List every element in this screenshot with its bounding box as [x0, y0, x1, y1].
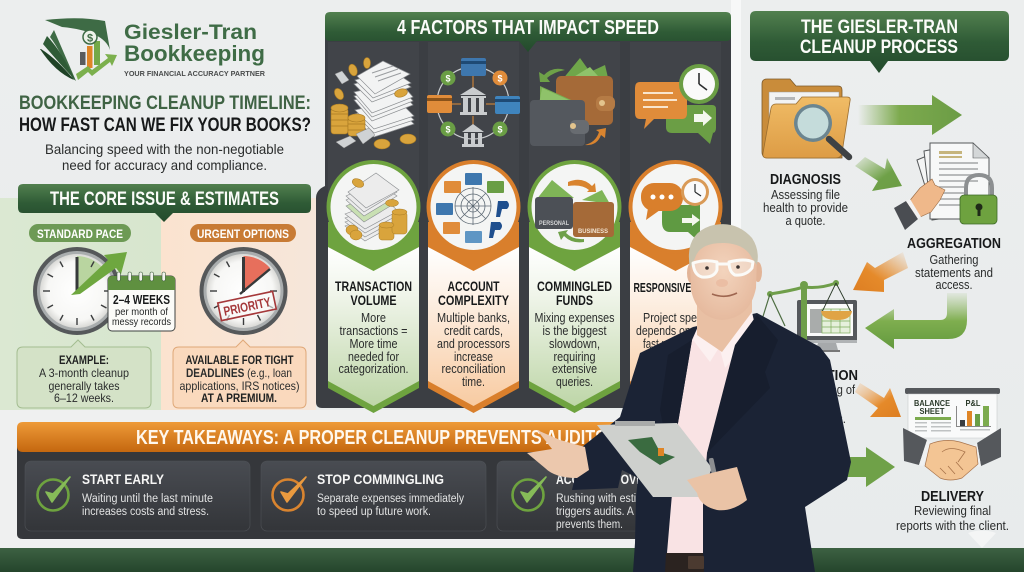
card: responsiveness	[628, 160, 722, 413]
card: account complexity	[426, 160, 520, 413]
panel background	[316, 30, 731, 408]
callout: example	[17, 340, 151, 408]
card title	[438, 279, 509, 308]
card text: More	[361, 311, 386, 325]
card title	[537, 279, 612, 308]
banner	[17, 422, 725, 452]
icon: priority clock	[200, 247, 288, 335]
card text: transactions =	[340, 324, 408, 338]
step: aggregation: AGGREGATION	[907, 236, 1001, 252]
step: aggregation: Gathering	[930, 253, 979, 267]
takeaway: accuracy over speed: prevents them.	[556, 519, 623, 531]
takeaway: start early: Waiting until the last minute	[82, 493, 213, 505]
callout: available for tight deadlines: AT A PREMIUM.	[201, 391, 277, 405]
step: aggregation	[907, 236, 1001, 292]
heading: the core issue and estimates: THE CORE ISSUE & ESTIMATES	[50, 189, 279, 210]
step: reconciliation	[746, 368, 858, 426]
callout: example: EXAMPLE:	[59, 353, 109, 367]
takeaway: accuracy over speed: triggers audits. A proper cleanup	[556, 506, 706, 518]
card: transaction volume	[326, 160, 420, 413]
banner: KEY TAKEAWAYS: A PROPER CLEANUP PREVENTS AUDITS	[136, 427, 606, 449]
calendar: 2-4 weeks	[108, 272, 175, 331]
logo mark: $	[87, 32, 93, 44]
icon: reports and handshake: BALANCE	[914, 398, 950, 408]
takeaway: accuracy over speed	[497, 461, 722, 531]
card text	[437, 311, 510, 389]
arrow: curved return	[865, 293, 967, 349]
background tint: standard pace column	[0, 198, 161, 412]
card text: Project speed	[643, 311, 709, 325]
heading: 4 FACTORS THAT IMPACT SPEED	[397, 17, 659, 39]
icon: reports and handshake	[903, 388, 1001, 480]
subtitle: Balancing speed with the non-negotiable	[45, 141, 284, 157]
card: commingled funds	[528, 160, 622, 413]
step: diagnosis	[763, 172, 848, 228]
icon: banks and cards network: $	[497, 74, 503, 84]
head	[687, 224, 762, 320]
icon: green check	[512, 477, 546, 510]
icon: paper stacks and coins	[331, 58, 416, 149]
heading: the core issue and estimates	[18, 184, 311, 222]
calendar: 2-4 weeks: messy records	[112, 316, 171, 328]
icon: banks and cards network: $	[445, 74, 451, 84]
calendar: 2-4 weeks: 2–4 WEEKS	[113, 293, 170, 307]
icon: personal and business wallets	[535, 180, 614, 242]
arrow: aggregation to reconciliation	[853, 252, 908, 292]
arrow: diagnosis to aggregation	[855, 157, 902, 191]
step: reconciliation: RECONCILIATION	[746, 368, 858, 384]
card text	[636, 311, 714, 351]
suit	[572, 313, 851, 572]
card text: requiring	[554, 350, 596, 364]
icon: chat bubbles and clock	[635, 64, 719, 144]
icon: orange check	[272, 477, 306, 510]
callout: available for tight deadlines: applications, IRS notices)	[180, 379, 300, 393]
calendar: 2-4 weeks: per month of	[115, 306, 168, 318]
icon: green check	[38, 477, 70, 510]
icon: reports and handshake: SHEET	[920, 406, 945, 416]
glasses	[693, 260, 753, 277]
card text: queries.	[556, 375, 593, 389]
right hand	[687, 467, 747, 510]
belt	[665, 553, 704, 572]
step: aggregation: statements and	[915, 266, 993, 280]
card text: fast responses.	[643, 337, 709, 351]
logo: Giesler-Tran Bookkeeping	[40, 18, 266, 81]
card text: Mixing expenses	[534, 311, 614, 325]
icon: chat and clock	[641, 178, 709, 240]
card text: is the biggest	[542, 324, 607, 338]
card text: reconciliation	[442, 362, 506, 376]
step: delivery: reports with the client.	[896, 519, 1009, 533]
main title	[19, 92, 311, 136]
panel: 4 factors that impact speed	[316, 12, 731, 413]
takeaway: accuracy over speed: Rushing with estimates	[556, 493, 665, 505]
heading	[750, 11, 1009, 73]
icon: banks and cards network: $	[445, 124, 451, 134]
main title: HOW FAST CAN WE FIX YOUR BOOKS?	[19, 114, 311, 136]
card text: and processors	[437, 337, 510, 351]
callout: example: generally takes	[48, 379, 120, 393]
icon: web of accounts	[436, 173, 509, 243]
takeaway: start early: increases costs and stress.	[82, 506, 209, 518]
background tint: urgent options column	[161, 198, 316, 412]
takeaway: stop commingling	[261, 461, 486, 531]
step: delivery	[896, 488, 1009, 533]
logo tagline: YOUR FINANCIAL ACCURACY PARTNER	[124, 69, 266, 78]
pen	[708, 458, 717, 474]
takeaway: stop commingling: Separate expenses immediately	[317, 493, 464, 505]
card text: needed for	[348, 350, 399, 364]
icon: scales and monitor	[760, 280, 857, 352]
pill: urgent options: URGENT OPTIONS	[197, 227, 289, 241]
card text: More time	[350, 337, 398, 351]
callout: available for tight deadlines	[173, 340, 306, 408]
callout: available for tight deadlines: AVAILABLE FOR TIGHT	[186, 353, 294, 367]
footer band	[0, 548, 1024, 572]
panel background	[17, 440, 725, 539]
icon: priority clock: PRIORITY	[222, 294, 272, 319]
card title: TRANSACTION	[335, 279, 412, 294]
logo mark	[40, 18, 117, 81]
step: delivery: DELIVERY	[921, 488, 984, 505]
callout: example: A 3-month cleanup	[39, 366, 129, 380]
card text: slowdown,	[549, 337, 600, 351]
heading: THE GIESLER-TRAN	[801, 16, 958, 38]
presenter with clipboard	[527, 224, 851, 572]
heading: CLEANUP PROCESS	[800, 36, 958, 58]
takeaway: stop commingling: to speed up future work.	[317, 506, 431, 518]
takeaway: start early	[25, 461, 250, 531]
takeaway: start early: START EARLY	[82, 471, 165, 487]
logo: Giesler-Tran Bookkeeping: Bookkeeping	[124, 41, 265, 66]
subtitle: need for accuracy and compliance.	[62, 157, 267, 173]
card title: COMPLEXITY	[438, 293, 509, 308]
suit lapels	[660, 340, 692, 470]
arrow: reconciliation to delivery	[855, 383, 901, 417]
takeaway: accuracy over speed: ACCURACY OVER SPEED	[556, 471, 691, 487]
card text: credit cards,	[444, 324, 503, 338]
card text	[534, 311, 614, 389]
step: reconciliation: and statements.	[764, 412, 846, 426]
step: diagnosis: health to provide	[763, 201, 848, 215]
step: diagnosis: DIAGNOSIS	[770, 172, 841, 188]
pill: standard pace: STANDARD PACE	[37, 227, 123, 241]
card text: extensive	[552, 362, 597, 376]
card title: VOLUME	[350, 293, 396, 308]
icon: banks and cards network	[427, 58, 520, 147]
card title: RESPONSIVENESS	[634, 280, 716, 295]
icon: reports and handshake: P&L	[966, 398, 980, 408]
icon: wallets with cash	[530, 58, 615, 146]
card text: time.	[462, 375, 485, 389]
card title: COMMINGLED	[537, 279, 612, 294]
card title: ACCOUNT	[448, 279, 500, 294]
card text	[338, 311, 408, 376]
pill: urgent options	[190, 224, 296, 242]
step: diagnosis: Assessing file	[771, 188, 840, 202]
step: aggregation: access.	[936, 278, 972, 292]
icon: personal and business wallets: BUSINESS	[578, 228, 609, 235]
standard pace column	[17, 224, 175, 408]
neck	[697, 290, 752, 352]
panel: the Giesler-Tran cleanup process	[746, 11, 1009, 533]
card text: increase	[454, 350, 493, 364]
callout: example: 6–12 weeks.	[54, 391, 114, 405]
step: diagnosis: a quote.	[786, 214, 826, 228]
card title	[335, 279, 412, 308]
arrow: to delivery	[840, 447, 895, 487]
step: reconciliation: transactions	[767, 397, 833, 411]
step: delivery: Reviewing final	[914, 504, 991, 518]
card text: Multiple banks,	[437, 311, 510, 325]
icon: banks and cards network: $	[497, 124, 503, 134]
left hand	[527, 430, 589, 478]
step: reconciliation: Detailed matching of	[755, 383, 855, 397]
arrow: diagnosis across	[858, 95, 962, 135]
pill: standard pace	[29, 224, 131, 242]
main title: BOOKKEEPING CLEANUP TIMELINE:	[19, 92, 311, 114]
shirt	[667, 315, 754, 553]
card text: depends on your	[636, 324, 714, 338]
card title: FUNDS	[556, 293, 593, 308]
callout: available for tight deadlines: DEADLINES (e.g., loan	[186, 366, 292, 380]
icon: personal and business wallets: PERSONAL	[539, 220, 569, 227]
icon: documents, hand and lock	[894, 143, 997, 230]
panel: key takeaways	[17, 422, 725, 539]
card text: categorization.	[338, 362, 408, 376]
icon: standard clock with arrow	[33, 247, 127, 335]
takeaway: stop commingling: STOP COMMINGLING	[317, 471, 444, 487]
heading	[325, 12, 731, 52]
subtitle	[45, 141, 284, 173]
logo name: Giesler-Tran	[124, 21, 257, 44]
urgent options column	[173, 224, 306, 408]
clipboard	[597, 421, 712, 497]
icon: paper stack and coins	[345, 173, 407, 241]
icon: folder and magnifier	[762, 79, 850, 158]
